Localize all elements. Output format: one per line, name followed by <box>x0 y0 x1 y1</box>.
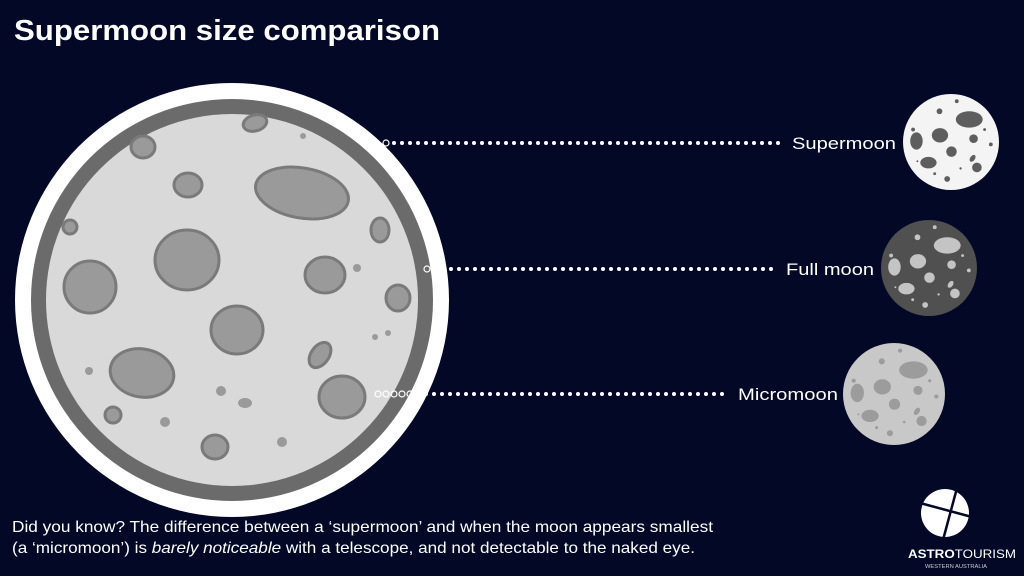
label: micromoon: Micromoon <box>738 385 838 404</box>
icon: micromoon <box>843 343 945 445</box>
logo: astrotourism <box>908 488 1016 570</box>
title: Supermoon size comparison <box>14 15 440 47</box>
logo: astrotourism: ASTRO TOURISM <box>908 547 1016 561</box>
dotted line: full moon <box>424 266 775 272</box>
label: supermoon: Supermoon <box>792 134 896 153</box>
footer text <box>12 519 714 557</box>
dotted line: supermoon <box>383 140 780 146</box>
dotted line: micromoon <box>375 391 727 397</box>
logo: astrotourism: WESTERN AUSTRALIA <box>925 564 988 570</box>
icon: full moon <box>881 220 977 316</box>
big moon <box>15 83 449 517</box>
icon: supermoon <box>903 94 999 190</box>
footer text: (a ‘micromoon’) is barely noticeable with a telescope, and not detectable to the naked eye. <box>12 540 695 557</box>
label: full moon: Full moon <box>786 260 874 279</box>
footer text: Did you know? The difference between a ‘supermoon’ and when the moon appears smallest <box>12 519 714 536</box>
